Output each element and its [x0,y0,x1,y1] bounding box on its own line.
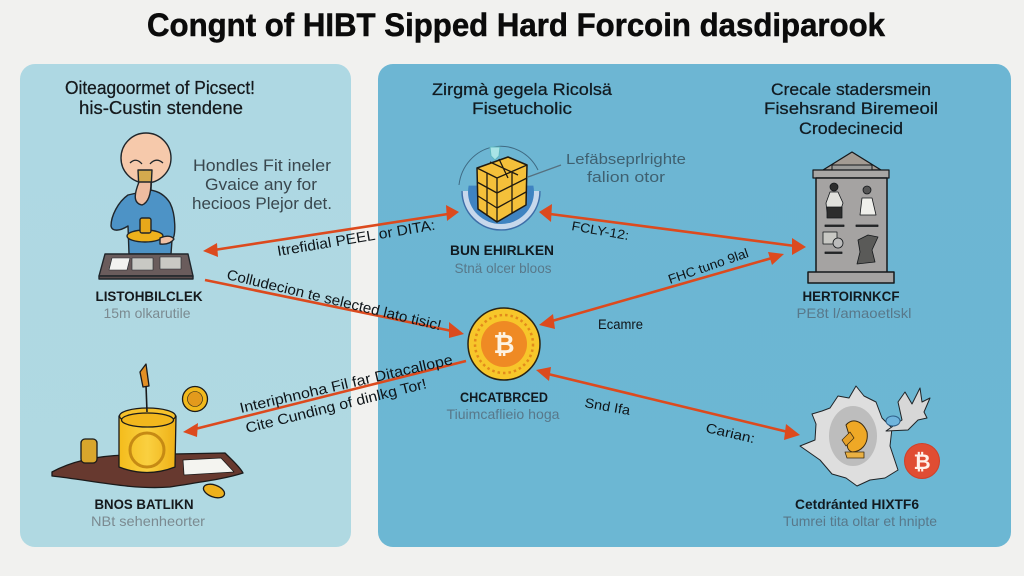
arrow: coin to building [539,252,784,329]
building body [816,178,887,273]
person head [121,133,171,183]
arrow: person to coin [205,280,464,338]
jar [119,416,176,472]
floating coin [182,386,208,412]
arrow label: coin to building lower: Ecamre [598,317,643,332]
label: person: 15m olkarutile [104,305,191,321]
label: person [96,289,203,321]
panel: right [378,64,1011,547]
desk [99,254,193,276]
text block: cube callout: falion otor [587,169,665,186]
illustration: golden jar on table [52,364,243,500]
gold cube [477,157,527,222]
label: person: LISTOHBILCLEK [96,289,203,304]
heading: centre column: Fisetucholic [472,99,573,118]
icon: red bitcoin badge: ₿ [913,451,931,474]
label: building: HERTOIRNKCF [802,289,900,304]
text block: cube callout: Lefäbseprlrighte [566,151,686,168]
illustration: grey institution building [808,152,894,283]
arrow label: coin to building upper: FHC tuno 9lal [666,245,751,287]
panel: left [20,64,351,547]
gold chunk [81,439,97,463]
arrow: person to cube [203,205,459,257]
bowl [461,191,541,231]
label: coin: Tiuimcaflieio hoga [446,406,560,422]
icon: bitcoin coin [468,308,540,380]
heading: right column: Fisehsrand Biremeoil [764,99,938,118]
line: cube callout leader [528,165,561,177]
arrow label: cube to building: FCLY-12: [570,218,630,243]
text block: cube callout [566,151,686,186]
label: jar [91,496,205,529]
gem [490,147,500,160]
label: cube [450,243,554,276]
gold item [846,421,867,452]
illustration: gold cube in dome [459,146,540,230]
text block: person note: Hondles Fit ineler [193,156,331,175]
person body [111,190,175,254]
label: cube: Stnä olcer bloos [454,260,552,276]
label: explosion: Cetdránted HIXTF6 [795,496,919,512]
label: explosion: Tumrei tita oltar et hnipte [783,513,937,529]
text block: person note: Gvaice any for [205,175,317,194]
title: Congnt of HIBT Sipped Hard Forcoin dasdiparook [147,7,885,43]
heading: left panel [65,78,255,118]
label: coin: CHCATBRCED [460,390,548,405]
phone in hand [138,170,152,190]
arrow label: person to coin: Colludecion te selected lato tisic! [225,267,443,334]
arrow label: coin to explosion upper: Snd Ifa [583,395,632,418]
spark stick [146,385,147,412]
text block: person note: hecioos Plejor det. [192,194,332,213]
table [52,453,243,488]
arrow: coin to explosion [536,367,800,440]
heading: centre column [432,80,613,118]
arrow label: coin to jar upper: Interiphnoha Fil far Ditacallope [238,352,454,417]
heading: left panel: Oiteagoormet of Picsect! [65,78,255,98]
text block: person note [192,156,332,213]
arrow label: person to cube: Itrefidial PEEL or DITA: [276,218,436,260]
arrow label: coin to explosion lower: Carian: [704,420,756,446]
label: coin [446,390,560,422]
spiky fragment [886,388,930,431]
label: jar: BNOS BATLIKN [94,496,194,512]
golden plate with item [127,230,163,242]
arrow labels [225,218,756,446]
label: building [796,289,912,321]
base [808,272,894,283]
icon: red bitcoin badge [904,444,940,478]
illustration: cracked explosion with gold item [800,386,930,486]
roof [823,152,881,170]
heading: centre column: Zirgmà gegela Ricolsä [432,80,613,99]
label: jar: NBt sehenheorter [91,513,205,529]
heading: left panel: his-Custin stendene [79,98,243,118]
small coin [202,482,226,500]
label: building: PE8t l/amaoetlskl [796,305,912,321]
dome [459,146,538,185]
burst [800,386,898,486]
label: explosion [783,496,937,529]
arrow: coin to jar [183,361,466,437]
heading: right column: Crodecinecid [799,119,903,138]
illustration: person with phone at desk [99,133,193,279]
paper [183,458,234,475]
label: cube: BUN EHIRLKEN [450,243,554,258]
arrow label: coin to jar lower: Cite Cunding of dinlkg Tor! [244,376,428,437]
heading: right column [764,80,938,138]
icon: bitcoin coin: ₿ [493,329,515,359]
figures on building [823,183,878,264]
arrow: cube to building [539,204,806,255]
entablature [813,170,889,178]
heading: right column: Crecale stadersmein [771,80,931,99]
